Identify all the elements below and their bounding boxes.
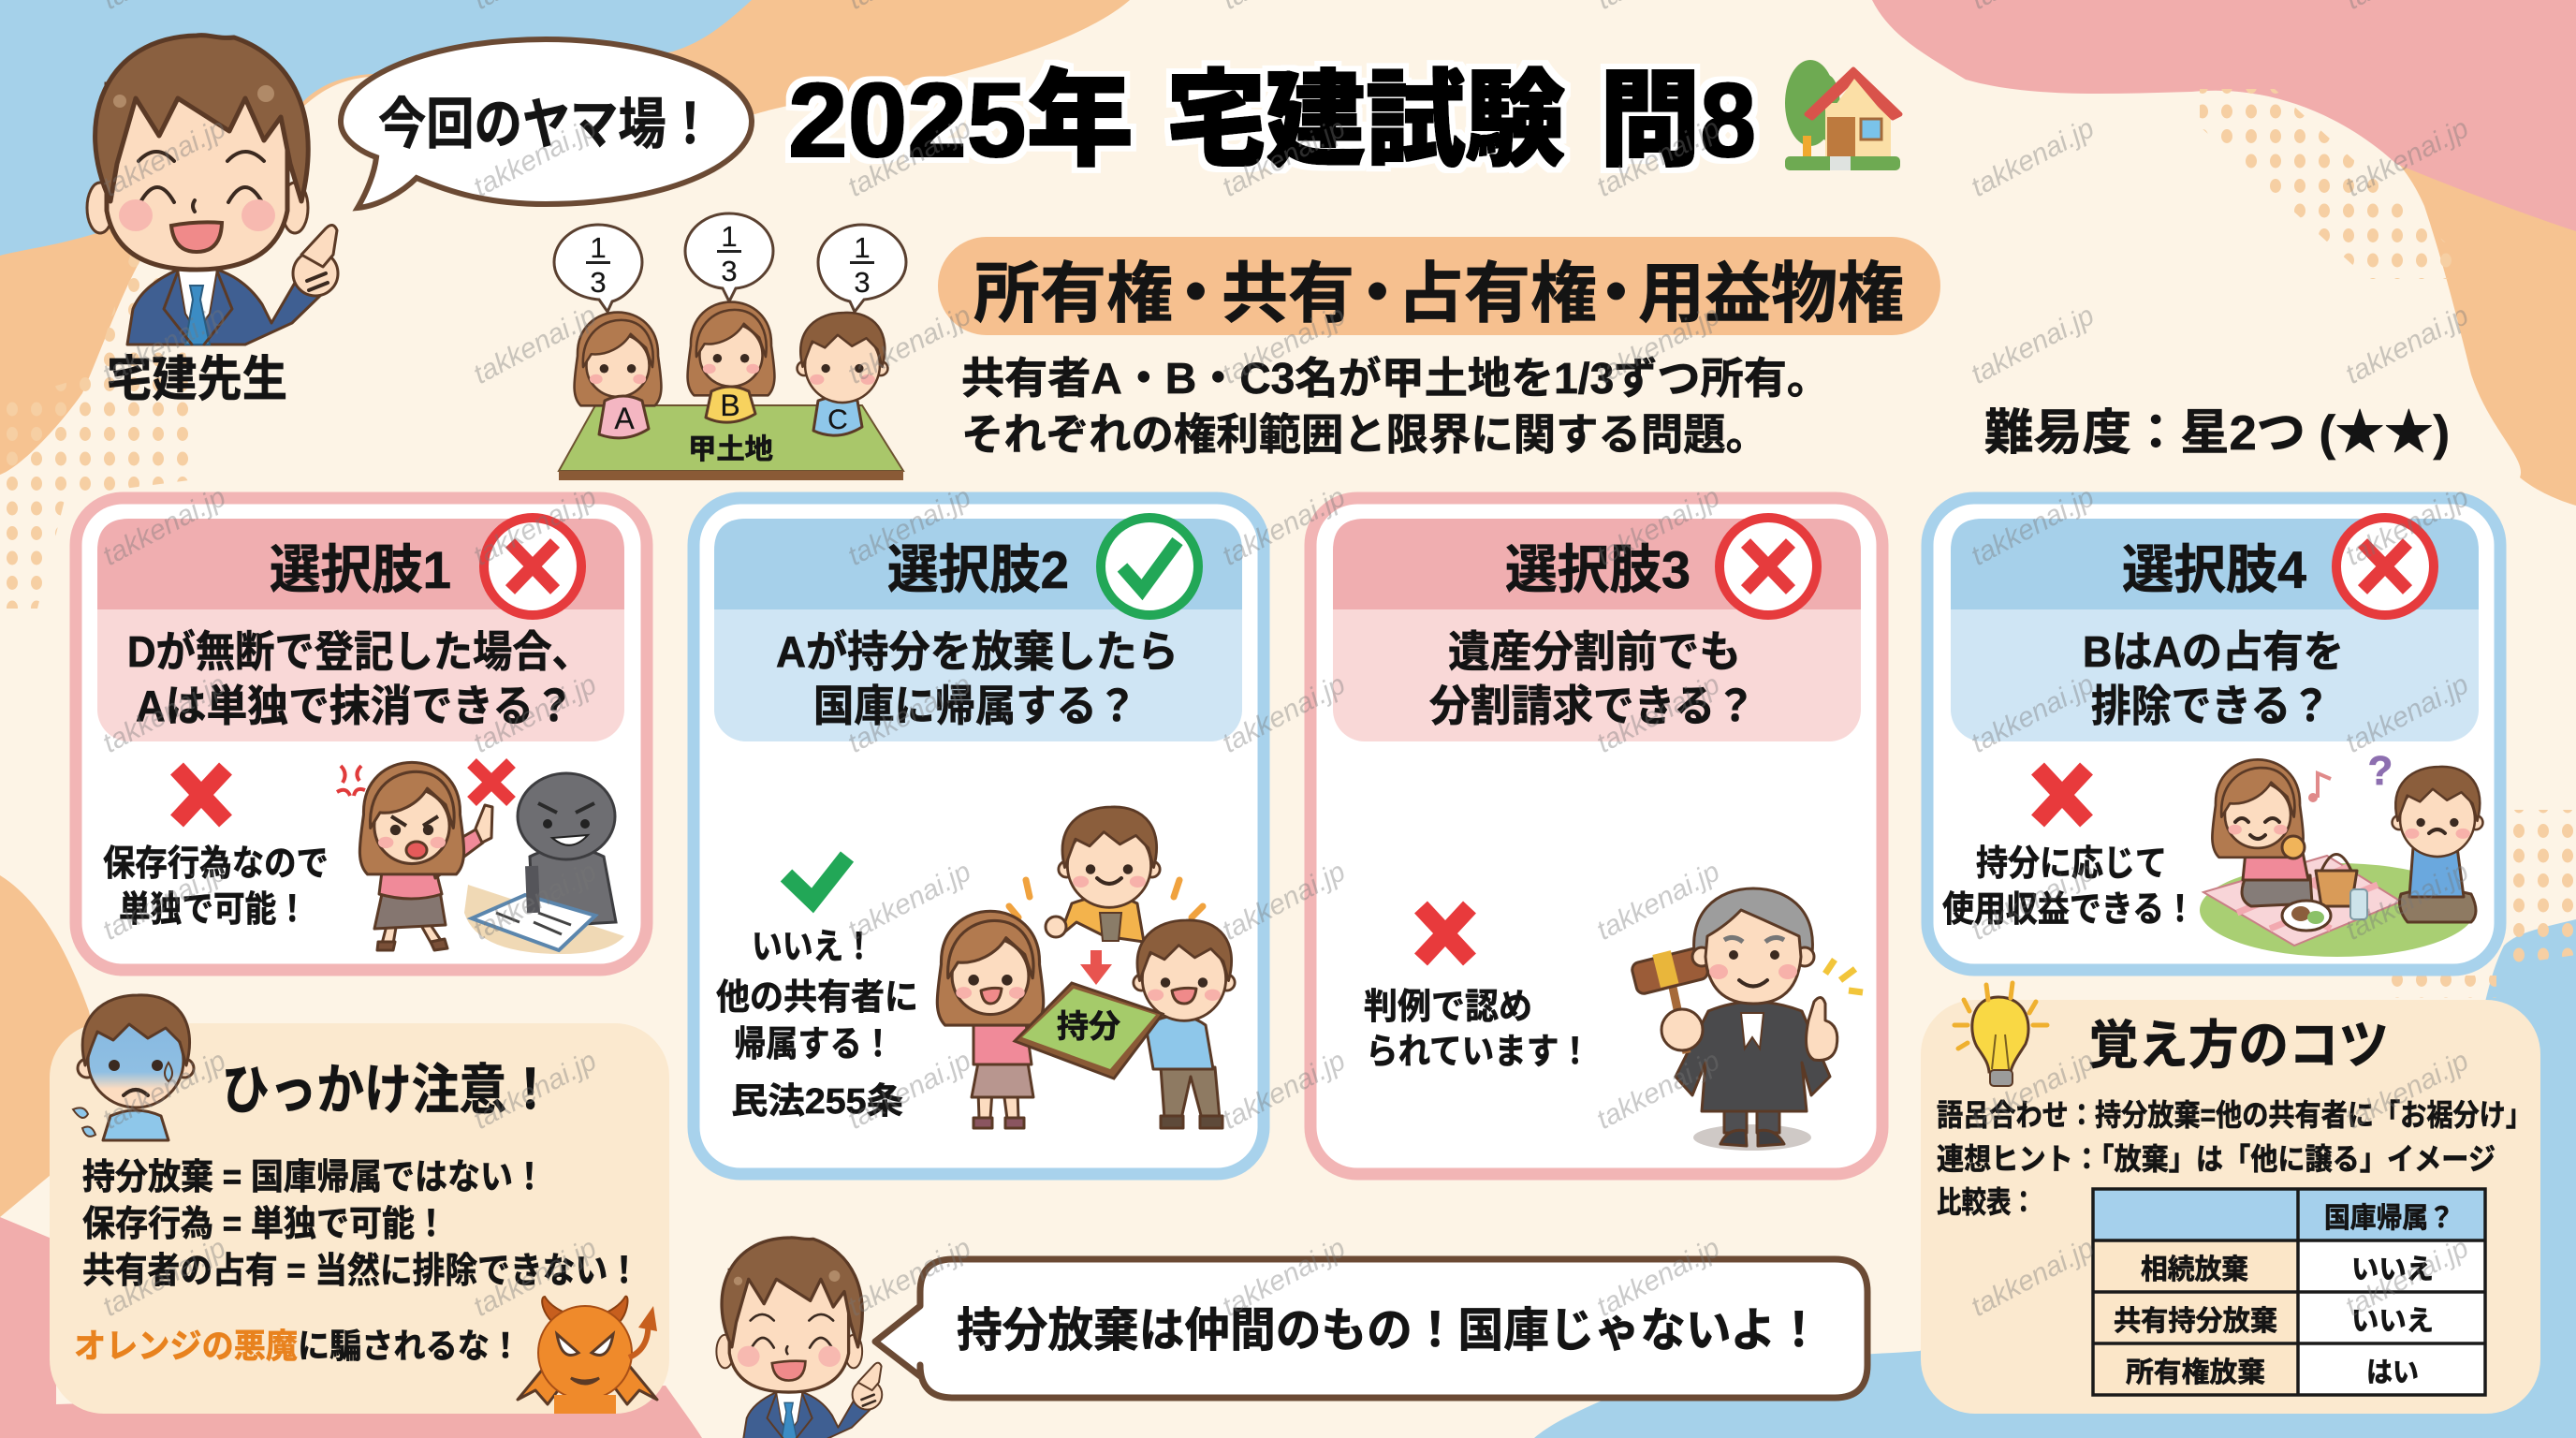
comparison table: はい xyxy=(2366,1357,2419,1388)
speech bubble: 今回のヤマ場: 今回のヤマ場！ xyxy=(378,94,714,155)
mnemonic lines: 連想ヒント：「放棄」は「他に譲る」イメージ xyxy=(1937,1142,2496,1176)
land 甲土地 with co-owners A B C: B xyxy=(720,389,740,422)
subtitle pill: 占有権 xyxy=(1398,257,1597,331)
question header 2: Aが持分を放棄したら xyxy=(776,627,1178,676)
answer text 4 xyxy=(1942,844,2196,930)
illustration: judge with gavel xyxy=(1631,888,1863,1151)
answer text 2: 帰属する！ xyxy=(734,1025,894,1064)
question header 3: 遺産分割前でも xyxy=(1448,627,1741,676)
answer text 2: 他の共有者に xyxy=(716,978,918,1018)
answer text 2: いいえ！ xyxy=(752,928,874,967)
watermark: takkenai.jp xyxy=(1966,668,2100,759)
mnemonic lines: 比較表： xyxy=(1937,1185,2036,1219)
comparison table: いいえ xyxy=(2351,1306,2434,1337)
badge: wrong 3 xyxy=(1720,518,1817,615)
answer text 2 xyxy=(716,928,918,1122)
answer text 2: 民法255条 xyxy=(731,1082,903,1122)
watermark: takkenai.jp xyxy=(468,1045,602,1136)
watermark: takkenai.jp xyxy=(1217,112,1351,203)
watermark: takkenai.jp xyxy=(97,668,231,759)
speech bubble: 今回のヤマ場 xyxy=(341,39,752,208)
badge: wrong 4 xyxy=(2336,518,2434,615)
question header 4: BはAの占有を xyxy=(2083,627,2344,676)
watermark: takkenai.jp xyxy=(2340,668,2474,759)
watermark: takkenai.jp xyxy=(1217,856,1351,946)
icon: red cross 4 xyxy=(2038,769,2086,821)
question header 1: Aは単独で抹消できる？ xyxy=(136,682,575,730)
fraction bubbles: 1 xyxy=(854,231,871,264)
watermark: takkenai.jp xyxy=(1217,668,1351,759)
panel: trap warning xyxy=(50,995,669,1414)
answer text 3 xyxy=(1364,988,1591,1072)
panel: choice 2 xyxy=(694,498,1264,1174)
panel: choice 1 xyxy=(76,498,647,970)
badge: wrong 1 xyxy=(484,518,581,615)
illustration: picnic on shared land xyxy=(2200,748,2482,957)
teacher small xyxy=(716,1238,882,1438)
watermark: takkenai.jp xyxy=(842,481,976,572)
watermark: takkenai.jp xyxy=(842,1232,976,1323)
description text xyxy=(961,354,1830,459)
illustration: woman objecting to registrant D xyxy=(337,762,624,954)
land 甲土地 with co-owners A B C: 甲土地 xyxy=(688,434,773,465)
watermark: takkenai.jp xyxy=(2340,300,2474,390)
watermark: takkenai.jp xyxy=(97,300,231,390)
watermark: takkenai.jp xyxy=(1591,300,1725,390)
trap points: 保存行為 = 単独で可能！ xyxy=(82,1205,447,1244)
question header 2: 選択肢2 xyxy=(887,540,1069,599)
watermark: takkenai.jp xyxy=(842,856,976,946)
watermark: takkenai.jp xyxy=(97,856,231,946)
speech bubble: bottom message: 持分放棄は仲間のもの！国庫じゃないよ！ xyxy=(957,1304,1822,1357)
watermark: takkenai.jp xyxy=(2340,1045,2474,1136)
question header 4 xyxy=(1951,519,2479,741)
question header 1: 選択肢1 xyxy=(270,540,451,599)
icon: red cross 1 xyxy=(177,769,226,821)
comparison table: 共有持分放棄 xyxy=(2114,1306,2277,1337)
watermark: takkenai.jp xyxy=(1966,1045,2100,1136)
question header 4: 排除できる？ xyxy=(2091,682,2331,730)
watermark: takkenai.jp xyxy=(1591,668,1725,759)
watermark: takkenai.jp xyxy=(468,112,602,203)
heading: trap warning: ひっかけ注意！ xyxy=(222,1060,554,1121)
description text: 共有者A・B・C3名が甲土地を1/3ずつ所有。 xyxy=(961,354,1830,403)
watermark: takkenai.jp xyxy=(468,856,602,946)
teacher character xyxy=(87,36,338,345)
answer text 4: 持分に応じて xyxy=(1976,844,2167,884)
trap points: 共有者の占有 = 当然に排除できない！ xyxy=(82,1252,640,1291)
fraction bubbles: 1 xyxy=(590,231,607,264)
comparison table xyxy=(2093,1189,2485,1395)
trap points: 持分放棄 = 国庫帰属ではない！ xyxy=(82,1158,546,1197)
illustration: share passing to co-owners xyxy=(937,807,1235,1128)
subtitle pill: ・ xyxy=(1583,257,1649,331)
watermark: takkenai.jp xyxy=(1217,481,1351,572)
question header 1: Dが無断で登記した場合、 xyxy=(127,627,592,676)
title: 問8 xyxy=(1600,62,1756,179)
icon: orange devil xyxy=(518,1297,657,1414)
panel: memory tips xyxy=(1921,983,2540,1414)
watermark: takkenai.jp xyxy=(1966,1232,2100,1323)
speech bubble: bottom message xyxy=(875,1259,1867,1398)
answer text 3: 判例で認め xyxy=(1364,988,1532,1027)
illustration: picnic on shared land: ? xyxy=(2368,748,2393,794)
question header 3 xyxy=(1333,519,1861,741)
answer text 1: 保存行為なので xyxy=(103,844,329,884)
subtitle pill: 用益物権 xyxy=(1638,257,1904,331)
fraction bubbles: 1 xyxy=(721,220,738,253)
watermark: takkenai.jp xyxy=(1217,1045,1351,1136)
watermark: takkenai.jp xyxy=(1966,481,2100,572)
watermark: takkenai.jp xyxy=(1966,300,2100,390)
watermark: takkenai.jp xyxy=(2340,112,2474,203)
watermark: takkenai.jp xyxy=(1591,856,1725,946)
description text: それぞれの権利範囲と限界に関する問題。 xyxy=(961,410,1768,459)
badge: correct 2 xyxy=(1101,518,1198,615)
subtitle pill: 所有権 xyxy=(973,257,1173,331)
answer text 1 xyxy=(103,844,329,930)
watermark: takkenai.jp xyxy=(1591,1232,1725,1323)
watermark: takkenai.jp xyxy=(97,112,231,203)
panel: choice 4 xyxy=(1927,498,2500,970)
watermark: takkenai.jp xyxy=(842,1045,976,1136)
comparison table: 所有権放棄 xyxy=(2126,1357,2265,1388)
watermark: takkenai.jp xyxy=(1217,300,1351,390)
watermark: takkenai.jp xyxy=(468,1232,602,1323)
icon: worried boy xyxy=(73,995,194,1140)
subtitle pill: 共有 xyxy=(1222,257,1354,331)
watermark: takkenai.jp xyxy=(2340,1232,2474,1323)
panel: choice 3 xyxy=(1310,498,1882,1174)
icon: light bulb xyxy=(1954,983,2047,1086)
watermark: takkenai.jp xyxy=(1966,856,2100,946)
subtitle pill: ・ xyxy=(1163,257,1229,331)
illustration: share passing to co-owners: 持分 xyxy=(1057,1009,1120,1045)
watermark: takkenai.jp xyxy=(2340,856,2474,946)
watermark: takkenai.jp xyxy=(2340,481,2474,572)
teacher name: 宅建先生 xyxy=(107,353,287,407)
icon: red cross 3 xyxy=(1421,907,1470,960)
answer text 1: 単独で可能！ xyxy=(119,890,308,930)
land 甲土地 with co-owners A B C: C xyxy=(827,404,848,435)
land 甲土地 with co-owners A B C xyxy=(559,302,903,480)
question header 1 xyxy=(97,519,624,741)
question header 3: 選択肢3 xyxy=(1505,540,1690,599)
answer text 4: 使用収益できる！ xyxy=(1942,890,2196,930)
comparison table: いいえ xyxy=(2351,1255,2434,1285)
trap points xyxy=(82,1158,640,1291)
watermark: takkenai.jp xyxy=(1966,112,2100,203)
comparison table: 相続放棄 xyxy=(2141,1255,2248,1285)
subtitle pill xyxy=(938,237,1940,335)
watermark: takkenai.jp xyxy=(842,300,976,390)
warning: orange devil text: オレンジの悪魔に騙されるな！ xyxy=(74,1327,521,1365)
watermark: takkenai.jp xyxy=(1591,481,1725,572)
question header 2 xyxy=(714,519,1242,741)
fraction bubbles: 3 xyxy=(854,266,871,299)
fraction bubbles: 3 xyxy=(721,255,738,287)
question header 2: 国庫に帰属する？ xyxy=(813,682,1137,730)
difficulty: 難易度：星2つ (★★) xyxy=(1984,406,2450,461)
watermark: takkenai.jp xyxy=(842,112,976,203)
watermark: takkenai.jp xyxy=(97,1045,231,1136)
watermark: takkenai.jp xyxy=(97,481,231,572)
heading: memory tips: 覚え方のコツ xyxy=(2088,1016,2389,1075)
comparison table: 国庫帰属？ xyxy=(2324,1203,2454,1234)
fraction bubbles xyxy=(554,213,906,312)
question header 4: 選択肢4 xyxy=(2122,540,2306,599)
icon: green check xyxy=(786,857,847,901)
land 甲土地 with co-owners A B C: A xyxy=(614,402,635,435)
watermark: takkenai.jp xyxy=(468,668,602,759)
watermark: takkenai.jp xyxy=(468,300,602,390)
watermark: takkenai.jp xyxy=(1591,112,1725,203)
watermark: takkenai.jp xyxy=(1591,1045,1725,1136)
watermark: takkenai.jp xyxy=(97,1232,231,1323)
title xyxy=(788,62,1756,179)
answer text 3: られています！ xyxy=(1366,1033,1591,1072)
title: 2025年 xyxy=(788,62,1134,179)
fraction bubbles: 3 xyxy=(590,266,607,299)
question header 3: 分割請求できる？ xyxy=(1429,682,1756,730)
watermark: takkenai.jp xyxy=(468,481,602,572)
icon: house and tree xyxy=(1785,60,1900,170)
title: 宅建試験 xyxy=(1166,62,1565,179)
watermark: takkenai.jp xyxy=(1217,1232,1351,1323)
watermark: takkenai.jp xyxy=(842,668,976,759)
mnemonic lines xyxy=(1937,1098,2532,1219)
subtitle pill: ・ xyxy=(1344,257,1411,331)
